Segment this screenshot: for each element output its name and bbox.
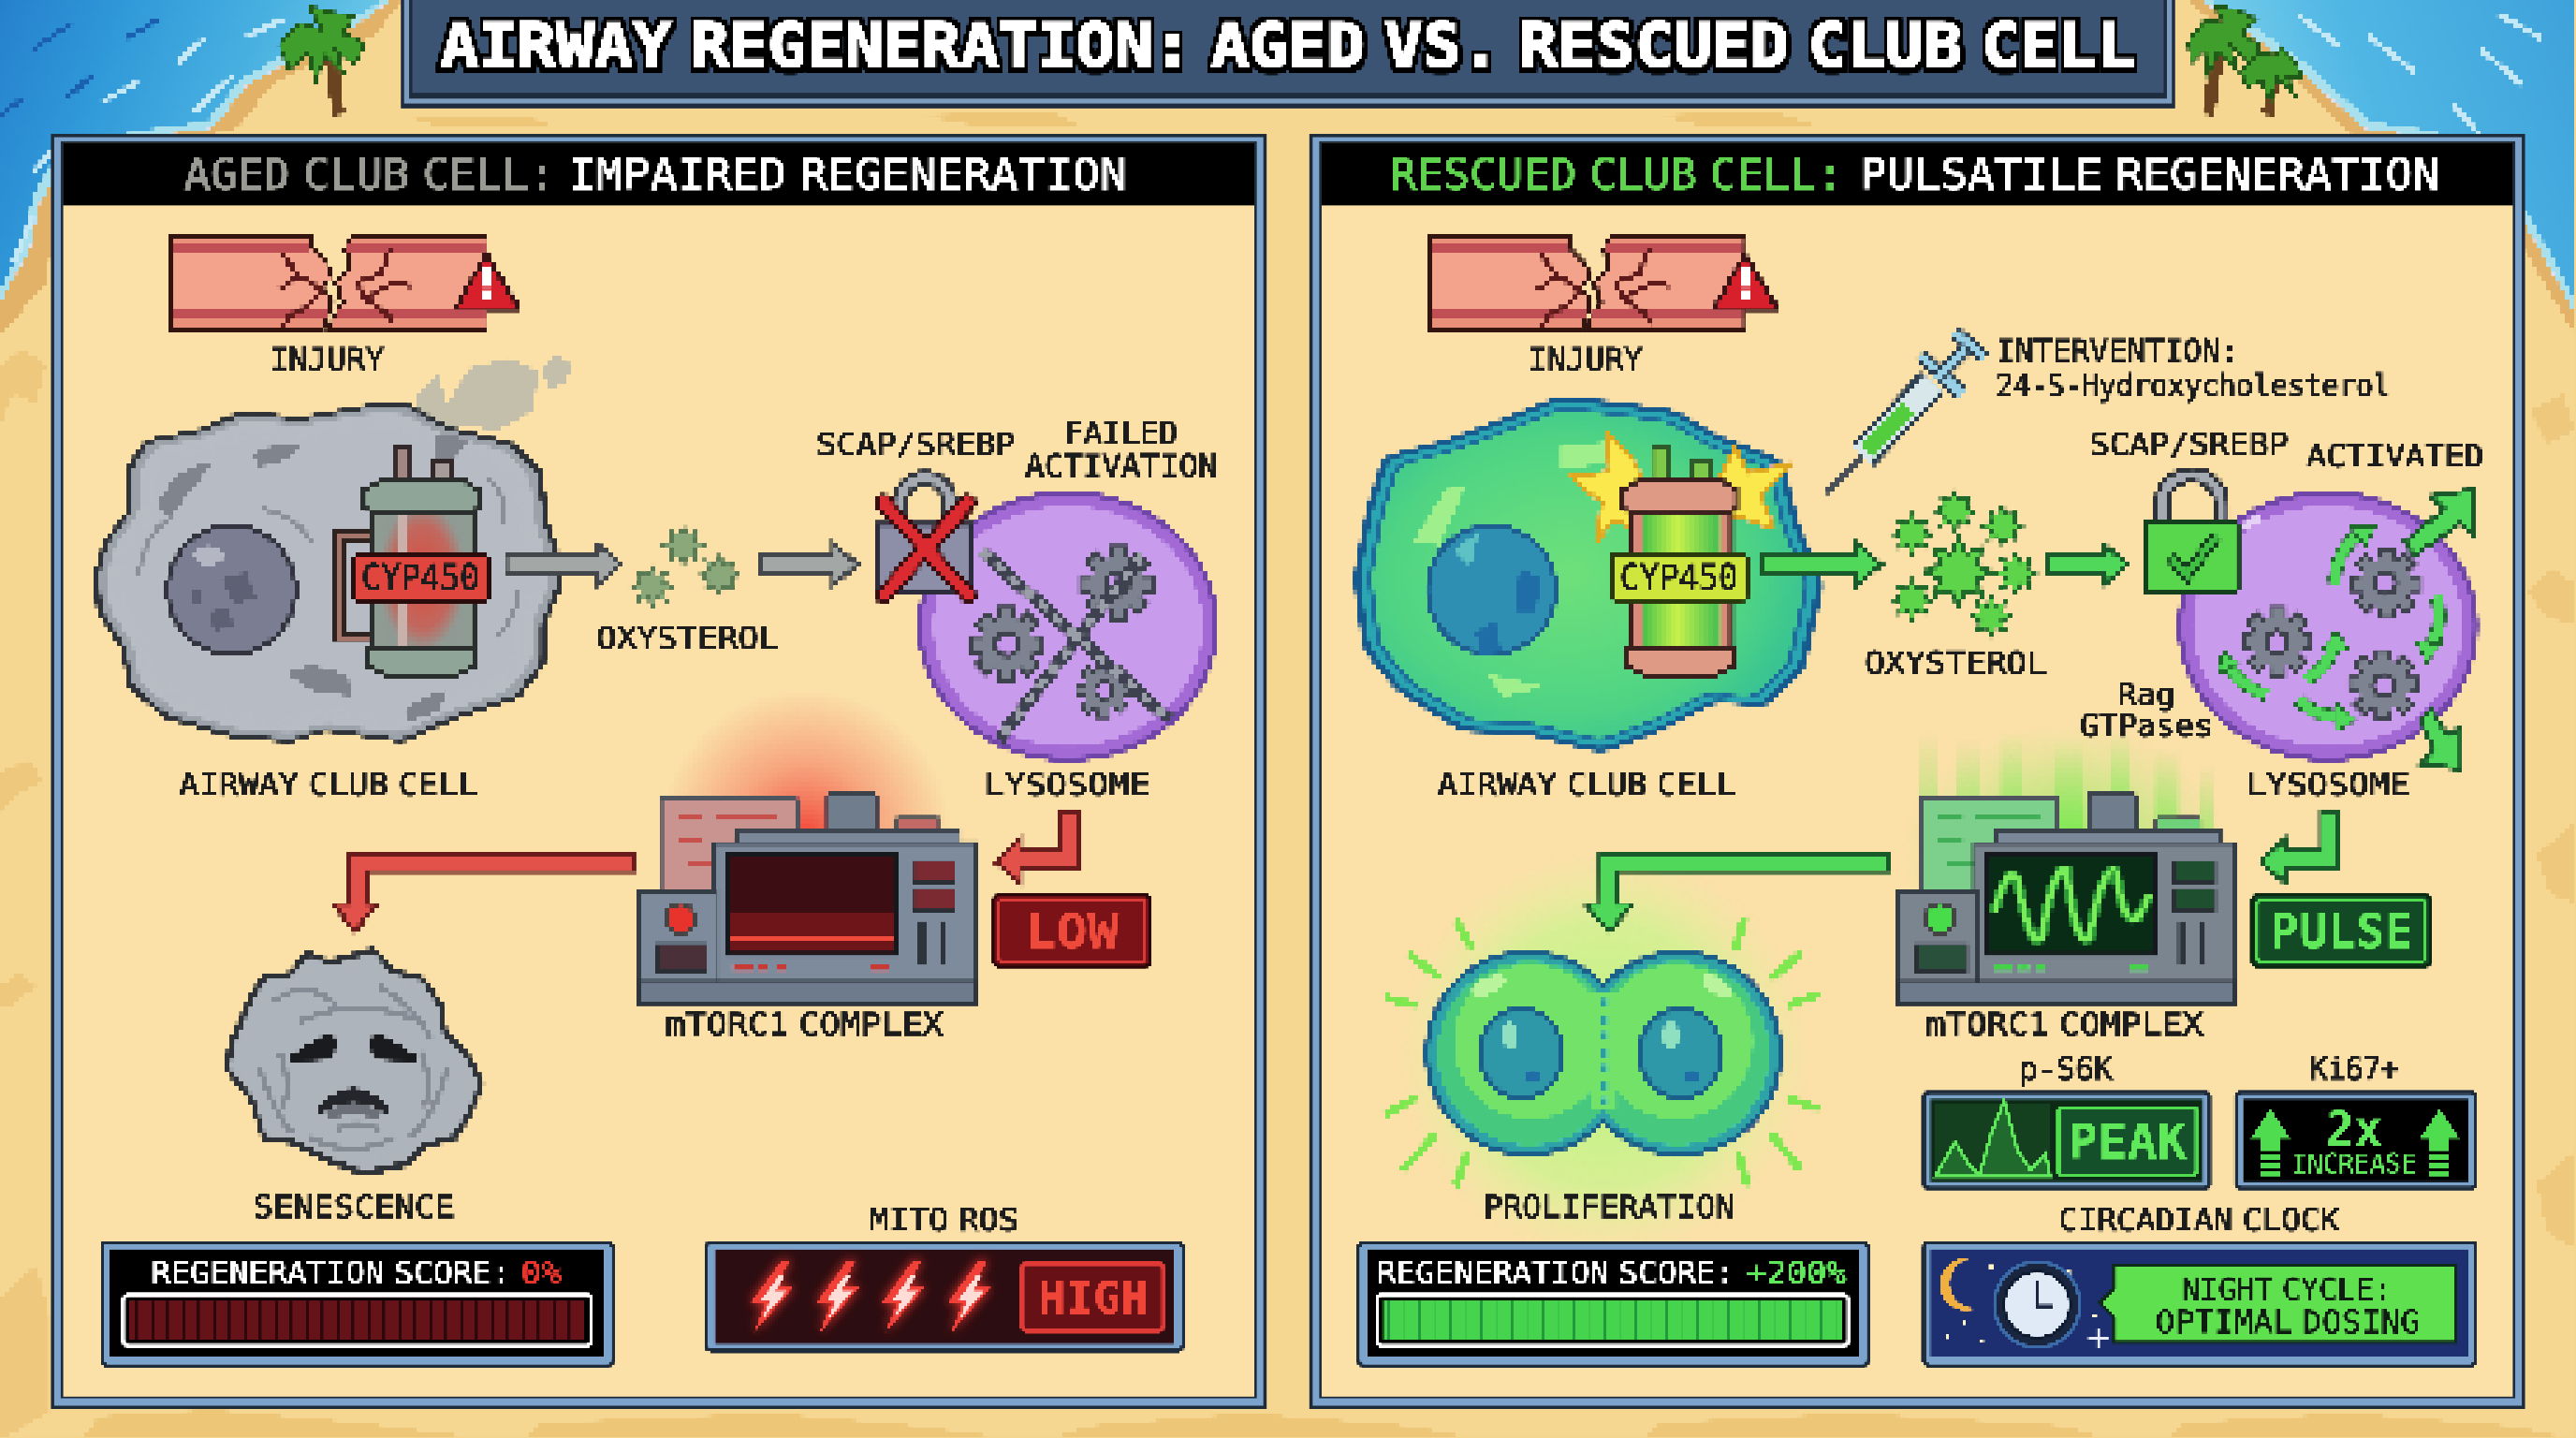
Ki67 2x increase meter: 2x <box>2326 1102 2382 1157</box>
panel heading <box>1390 150 2439 199</box>
label: intervention: INTERVENTION: <box>1996 332 2239 369</box>
label: Ki67+: Ki67+ <box>2310 1050 2398 1087</box>
icon: syringe <box>1827 332 1984 493</box>
title banner <box>401 0 2175 109</box>
label: injury: INJURY <box>270 341 385 377</box>
arrows: cycling inside lysosome <box>2228 534 2439 716</box>
panel: aged club cell <box>51 134 1266 1409</box>
label: proliferation: PROLIFERATION <box>1484 1189 1734 1225</box>
label: CYP450: CYP450 <box>361 557 479 599</box>
icon: nucleus <box>1427 526 1556 657</box>
arrow: cell to oxysterol <box>506 544 621 585</box>
label: circadian clock: CIRCADIAN CLOCK <box>2058 1202 2339 1239</box>
mito ROS meter <box>705 1240 1184 1352</box>
label: mTORC1 complex: mTORC1 COMPLEX <box>1925 1006 2203 1043</box>
label: Rag GTPases: GTPases <box>2080 707 2213 743</box>
callout: optimal dosing: NIGHT CYCLE: <box>2182 1270 2392 1307</box>
PULSE badge <box>2252 896 2430 966</box>
label: p-S6K: p-S6K <box>2019 1050 2113 1087</box>
label: failed activation: ACTIVATION <box>1025 448 1218 484</box>
icon: lightning bolts <box>751 1260 990 1332</box>
Ki67 2x increase meter: INCREASE <box>2291 1149 2417 1180</box>
regeneration score +200%: REGENERATION SCORE: <box>1377 1255 1734 1291</box>
panel heading <box>184 150 1127 199</box>
rays <box>1385 917 1819 1186</box>
icon: senescent cell with sad face <box>224 946 485 1177</box>
Ki67 2x increase meter <box>2234 1091 2478 1190</box>
panel: rescued club cell <box>1310 134 2525 1409</box>
icon: clock <box>1995 1262 2080 1347</box>
icon: mTORC1 machine (pulse) <box>1899 794 2234 1003</box>
illustrations: aged pathway <box>94 233 1216 1177</box>
callout: optimal dosing: OPTIMAL DOSING <box>2156 1303 2420 1340</box>
icon: active lysosome with gears <box>2180 490 2476 769</box>
label: lysosome: LYSOSOME <box>2246 766 2410 802</box>
labels: aged pathway <box>179 341 1218 1239</box>
label: airway club cell: AIRWAY CLUB CELL <box>179 766 478 802</box>
icon: oxysterol burst <box>1893 492 2036 636</box>
icon: nucleus <box>168 526 296 654</box>
label: lysosome: LYSOSOME <box>984 766 1150 802</box>
regeneration score 0% <box>100 1240 614 1367</box>
regeneration score 0%: REGENERATION SCORE: <box>151 1255 511 1291</box>
label: Rag GTPases: Rag <box>2117 676 2175 712</box>
icons: up arrows <box>2250 1109 2459 1176</box>
p-S6K peak meter: PEAK <box>2069 1113 2187 1170</box>
label: mito ROS: MITO ROS <box>869 1202 1018 1239</box>
panel frame and header <box>51 134 1266 1409</box>
arrow: oxysterol to lock <box>761 544 857 585</box>
label: SCAP/SREBP: SCAP/SREBP <box>816 426 1016 462</box>
icon: moon and stars <box>1940 1258 2108 1347</box>
label: oxysterol: OXYSTEROL <box>596 620 779 656</box>
circadian clock night cycle <box>1922 1240 2478 1367</box>
arrow: out down-right <box>2420 710 2461 769</box>
label: mTORC1 complex: mTORC1 COMPLEX <box>666 1006 943 1043</box>
rescued airway club cell <box>1354 396 1823 753</box>
icon: palm tree left <box>279 7 365 115</box>
panel frame and header <box>1310 134 2525 1409</box>
label: senescence: SENESCENCE <box>253 1189 455 1225</box>
glow: mTORC1 red <box>661 690 949 979</box>
arrow: lysosome to PULSE <box>2261 814 2338 882</box>
icon: injured airway <box>1427 233 1778 333</box>
arrow: oxysterol to lock <box>2049 544 2128 585</box>
panel heading: AGED CLUB CELL: <box>184 150 555 199</box>
icon: unlocked SCAP/SREBP with check <box>2145 475 2237 592</box>
panel heading: PULSATILE REGENERATION <box>1860 150 2439 199</box>
arrow: lysosome to LOW <box>996 814 1077 882</box>
icon: lysosome with chains and gears <box>920 493 1216 759</box>
arrow: out up-right <box>2404 490 2474 555</box>
regeneration score +200%: +200% <box>1747 1255 1847 1291</box>
illustrations: rescued pathway <box>1354 233 2476 1260</box>
PULSE badge: PULSE <box>2271 905 2413 961</box>
panel heading: RESCUED CLUB CELL: <box>1390 150 1843 199</box>
icon: smoke <box>417 355 572 447</box>
ocean: top left <box>0 0 402 337</box>
callout: optimal dosing <box>2100 1265 2456 1343</box>
arrow: mTORC1 to proliferation <box>1586 853 1889 932</box>
LOW badge: LOW <box>1025 905 1120 961</box>
label: intervention: 24-S-Hydroxycholesterol <box>1996 367 2391 404</box>
icon: injured airway <box>169 233 520 333</box>
panel heading: IMPAIRED REGENERATION <box>568 150 1127 199</box>
aged airway club cell <box>94 404 562 742</box>
title text: AIRWAY REGENERATION: AGED VS. RESCUED CLUB CELL <box>440 11 2136 81</box>
glow: mTORC1 green <box>1901 723 2230 986</box>
mito ROS meter: HIGH <box>1038 1272 1149 1325</box>
LOW badge <box>994 896 1150 966</box>
label: CYP450: CYP450 <box>1620 557 1738 599</box>
icon: CYP450 canister <box>339 447 488 675</box>
icon: proliferating dividing cell <box>1385 849 1819 1260</box>
icon: yellow sparks <box>1571 433 1791 542</box>
label: SCAP/SREBP: SCAP/SREBP <box>2089 426 2289 462</box>
icon: locked SCAP/SREBP with red X <box>879 478 973 594</box>
label: airway club cell: AIRWAY CLUB CELL <box>1438 766 1736 802</box>
icon: oxysterol particles <box>633 526 739 607</box>
icon: peak chart <box>1936 1101 2050 1177</box>
regeneration score 0%: 0% <box>520 1255 562 1291</box>
ocean: top right <box>2188 0 2576 337</box>
icon: mTORC1 machine (low) <box>639 794 974 1003</box>
label: oxysterol: OXYSTEROL <box>1865 645 2047 682</box>
icon: palm trees right <box>2188 7 2304 115</box>
label: failed activation: FAILED <box>1064 415 1178 451</box>
label: activated: ACTIVATED <box>2306 437 2484 474</box>
p-S6K peak meter <box>1922 1091 2211 1190</box>
labels: rescued pathway <box>1438 332 2484 1239</box>
icon: CYP450 canister active <box>1612 447 1747 675</box>
arrow: mTORC1 to senescence <box>333 853 633 932</box>
arrow: cell to oxysterol <box>1763 544 1881 585</box>
regeneration score +200% <box>1357 1240 1869 1367</box>
label: injury: INJURY <box>1528 341 1643 377</box>
